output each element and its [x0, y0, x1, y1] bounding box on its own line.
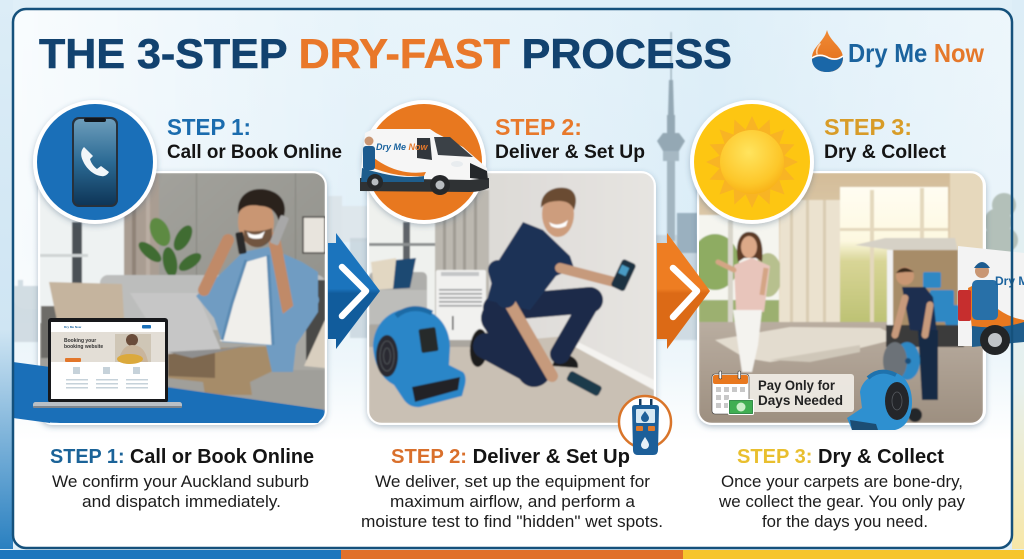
floor [369, 336, 654, 423]
man's legs [486, 300, 590, 372]
text block: step 1: We confirm your Auckland suburb [52, 472, 309, 491]
left window [699, 214, 780, 301]
large window [840, 187, 948, 322]
head [541, 200, 575, 238]
text block: step 1: STEP 1: Call or Book Online [50, 446, 314, 468]
heading: step 3: Dry & Collect [824, 142, 947, 163]
heading: step 2 [495, 114, 645, 163]
Sky Tower [657, 32, 685, 241]
sun patches on floor [715, 327, 900, 362]
sun rays [706, 116, 798, 208]
callout text: Pay Only for [758, 378, 836, 393]
heading: step 1: Call or Book Online [167, 142, 342, 163]
heading: step 2: Deliver & Set Up [495, 142, 645, 163]
man's shirt [196, 247, 318, 372]
driver figure on van [363, 146, 375, 170]
man's boots [469, 328, 486, 368]
arrow: step 1 to step 2 [328, 233, 380, 349]
bottom tricolour bar [0, 550, 1024, 559]
title: THE 3-STEP DRY-FAST PROCESS [39, 30, 732, 77]
icon: delivery van in orange circle [360, 100, 489, 224]
phones [235, 231, 247, 255]
icon: sun in yellow circle [690, 100, 814, 224]
head [238, 204, 274, 246]
pillow [48, 281, 124, 318]
callout: pay only for days needed [712, 371, 854, 415]
heading: step 1: STEP 1: [167, 114, 251, 140]
trees at right [980, 193, 1018, 282]
logo wordmark: Dry Me Now [848, 38, 985, 68]
panel 3 overflow: van body with branding [958, 246, 1024, 355]
hose roll [894, 342, 920, 380]
heading: step 2: STEP 2: [495, 114, 582, 140]
icon: blue air mover on trolley [847, 372, 912, 430]
floor [699, 322, 983, 423]
icon: laptop showing booking website: Booking your [64, 338, 96, 344]
icon: moisture meter [619, 396, 671, 455]
text block: step 2: We deliver, set up the equipment for [375, 472, 650, 491]
wall meter [610, 258, 637, 292]
heading: step 3 [824, 114, 947, 163]
tee [220, 256, 274, 345]
pants [168, 346, 279, 395]
icon: laptop showing booking website: Dry Me Now [64, 325, 82, 329]
dehumidifier [436, 270, 486, 340]
icon: laptop showing booking website: booking website [64, 344, 103, 350]
heading: step 1 [167, 114, 342, 163]
air mover [373, 308, 466, 407]
woman [734, 258, 770, 312]
text block: step 3: Once your carpets are bone-dry, [721, 472, 963, 491]
text block: step 2: moisture test to find "hidden" wet spots. [361, 512, 663, 531]
logo: Dry Me Now [812, 30, 985, 72]
arms [560, 268, 618, 283]
text block: step 3: for the days you need. [762, 512, 928, 531]
text block: step 2: maximum airflow, and perform a [390, 492, 636, 511]
concrete wall [40, 173, 325, 366]
icon: water drop [812, 30, 843, 72]
swoosh accent: left of step 1 panel [13, 362, 50, 423]
callout: pay only for days needed: Days Needed [758, 393, 843, 408]
sofa [100, 275, 325, 335]
panel: step 1 photo [38, 171, 327, 425]
icon: phone in blue circle [33, 100, 157, 224]
curtains [779, 200, 840, 299]
arrow: step 2 to step 3 [657, 233, 710, 349]
window [40, 191, 125, 324]
torso [487, 222, 574, 310]
van logo text: Dry Me Now [376, 142, 429, 152]
floor probe [566, 370, 603, 397]
arms [204, 240, 228, 290]
window and room [369, 192, 436, 315]
sofa with cushions [369, 272, 427, 328]
framed picture [303, 217, 325, 253]
icon: calendar and money [712, 371, 754, 415]
van rear [886, 249, 958, 326]
text block: step 3: we collect the gear. You only pay [718, 492, 965, 511]
text block: step 3 [718, 446, 965, 531]
text block: step 2: STEP 2: Deliver & Set Up [391, 446, 630, 468]
text block: step 3: STEP 3: Dry & Collect [737, 446, 944, 468]
van driver figure [972, 280, 998, 320]
man with trolley [902, 287, 937, 333]
panel: step 3 photo [691, 171, 987, 425]
text block: step 2 [361, 446, 663, 531]
wall [483, 173, 654, 380]
background skyline with Sky Tower [14, 32, 1018, 342]
plant [138, 217, 202, 276]
laptop behind [130, 293, 221, 354]
text block: step 1: and dispatch immediately. [82, 492, 281, 511]
curtain [125, 174, 158, 274]
blue swoosh [50, 386, 325, 423]
icon: laptop showing booking website [33, 318, 182, 408]
curtain [435, 190, 489, 340]
heading: step 3: STEP 3: [824, 114, 912, 140]
text block: step 1 [50, 446, 314, 511]
panel: step 2 photo [367, 171, 656, 425]
